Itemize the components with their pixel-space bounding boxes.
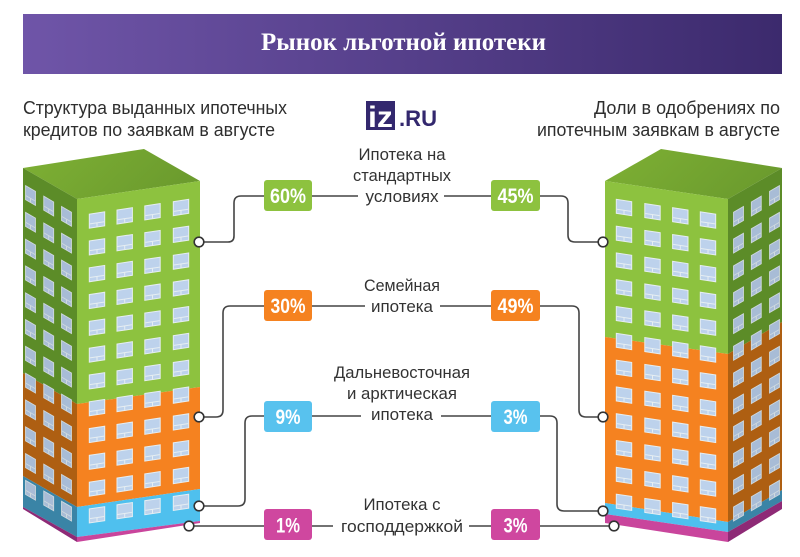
segment: standard mortgage 60% xyxy=(23,168,200,404)
title: Рынок льготной ипотеки xyxy=(261,29,546,56)
label: господдержкой xyxy=(341,517,463,536)
segment: state-supported mortgage 1% xyxy=(23,507,200,542)
value 60%: 60% xyxy=(270,185,306,208)
value 49% xyxy=(491,290,540,321)
segment: family mortgage 49% xyxy=(605,322,782,522)
value 3%: 3% xyxy=(504,514,528,538)
value 1%: 1% xyxy=(276,514,300,538)
value 45% xyxy=(491,180,540,211)
left building xyxy=(23,149,200,542)
label xyxy=(353,145,451,206)
left heading: Структура выданных ипотечных xyxy=(23,97,288,118)
left heading xyxy=(23,97,288,140)
value 45%: 45% xyxy=(498,185,534,208)
value 9%: 9% xyxy=(276,406,301,429)
label: Дальневосточная xyxy=(334,363,470,382)
right building xyxy=(605,149,782,542)
label: условиях xyxy=(366,187,439,206)
label: Семейная xyxy=(364,276,440,295)
value 1% xyxy=(264,509,312,540)
segment: far east and arctic mortgage 9% xyxy=(23,476,200,537)
title banner xyxy=(23,14,782,74)
value 30% xyxy=(264,290,312,321)
label: ипотека xyxy=(371,297,434,316)
roof xyxy=(605,149,782,199)
logo: iz.ru xyxy=(366,101,437,134)
value 60% xyxy=(264,180,312,211)
label: стандартных xyxy=(353,166,451,185)
windows xyxy=(25,185,189,524)
row: standard mortgage xyxy=(194,145,608,247)
segment: family mortgage 30% xyxy=(23,373,200,507)
row: state-supported mortgage xyxy=(184,495,619,540)
logo: iz.ru: iz xyxy=(368,101,393,134)
label: Ипотека с xyxy=(364,495,441,514)
label xyxy=(364,276,440,316)
right heading xyxy=(537,97,780,140)
value 30%: 30% xyxy=(270,295,306,318)
label: Ипотека на xyxy=(358,145,446,164)
logo: iz.ru: .RU xyxy=(399,106,437,131)
right heading: ипотечным заявкам в августе xyxy=(537,119,780,140)
roof xyxy=(23,149,200,199)
label: и арктическая xyxy=(347,384,457,403)
row: family mortgage xyxy=(194,276,608,422)
value 3%: 3% xyxy=(504,406,528,429)
right heading: Доли в одобрениях по xyxy=(594,97,780,118)
segment: state-supported mortgage 3% xyxy=(605,501,782,542)
value 3% xyxy=(491,509,540,540)
connectors xyxy=(194,196,608,247)
segment: far east and arctic mortgage 3% xyxy=(605,490,782,532)
connectors xyxy=(194,416,608,516)
value 49%: 49% xyxy=(498,295,534,318)
segment: standard mortgage 45% xyxy=(605,168,782,354)
label: ипотека xyxy=(371,405,434,424)
windows xyxy=(616,185,780,524)
value 9% xyxy=(264,401,312,432)
value 3% xyxy=(491,401,540,432)
connectors xyxy=(194,306,608,422)
label xyxy=(334,363,470,424)
left heading: кредитов по заявкам в августе xyxy=(23,119,275,140)
label xyxy=(341,495,463,536)
row: far east and arctic mortgage xyxy=(194,363,608,516)
connectors xyxy=(184,521,619,531)
